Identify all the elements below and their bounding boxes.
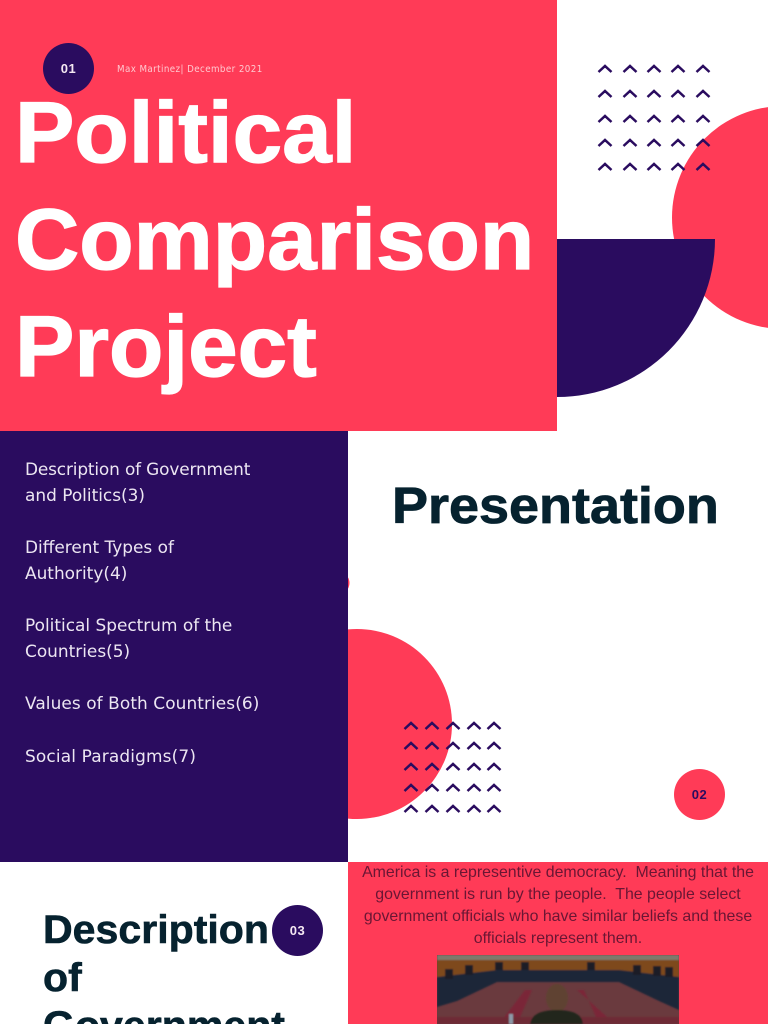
contents list: Authority(4) <box>25 564 127 583</box>
title <box>15 85 534 395</box>
body text: government officials who have similar beliefs and these <box>364 908 752 925</box>
author and date: Max Martinez| December 2021 <box>117 64 263 75</box>
body text: America is a representive democracy. Meaning that the <box>362 864 754 881</box>
title: Political <box>15 85 356 181</box>
contents list: Social Paradigms(7) <box>25 747 196 766</box>
body text: officials represent them. <box>474 930 642 947</box>
panel: presentation page <box>348 431 768 862</box>
page number badge 03: 03 <box>290 923 305 938</box>
page number badge 01: 01 <box>61 61 76 76</box>
contents list: and Politics(3) <box>25 486 145 505</box>
page number badge 03 <box>272 905 323 956</box>
heading: Description of Government: Description <box>43 908 269 952</box>
title: Project <box>15 299 317 395</box>
page number badge 02: 02 <box>692 787 707 802</box>
panel: title block <box>0 0 557 431</box>
heading: Description of Government <box>43 908 285 1024</box>
page number badge 02 <box>674 769 725 820</box>
body text <box>362 864 754 947</box>
panel: description heading page <box>0 862 348 1024</box>
contents list: Description of Government <box>25 460 250 478</box>
contents list: Values of Both Countries(6) <box>25 694 259 713</box>
page number badge 01 <box>43 43 94 94</box>
title: Comparison <box>15 192 534 288</box>
heading: Presentation: Presentation <box>392 477 719 534</box>
contents list: Political Spectrum of the <box>25 616 232 635</box>
heading: Description of Government: of <box>43 956 82 1000</box>
contents list <box>25 460 259 766</box>
panel: America description <box>348 862 768 1024</box>
photo: hearing room <box>437 955 679 1024</box>
body text: government is run by the people. The people select <box>375 886 741 903</box>
pink circle and chevrons <box>348 578 502 819</box>
panel: table of contents <box>0 431 348 862</box>
contents list: Countries(5) <box>25 642 130 661</box>
contents list: Different Types of <box>25 538 174 557</box>
